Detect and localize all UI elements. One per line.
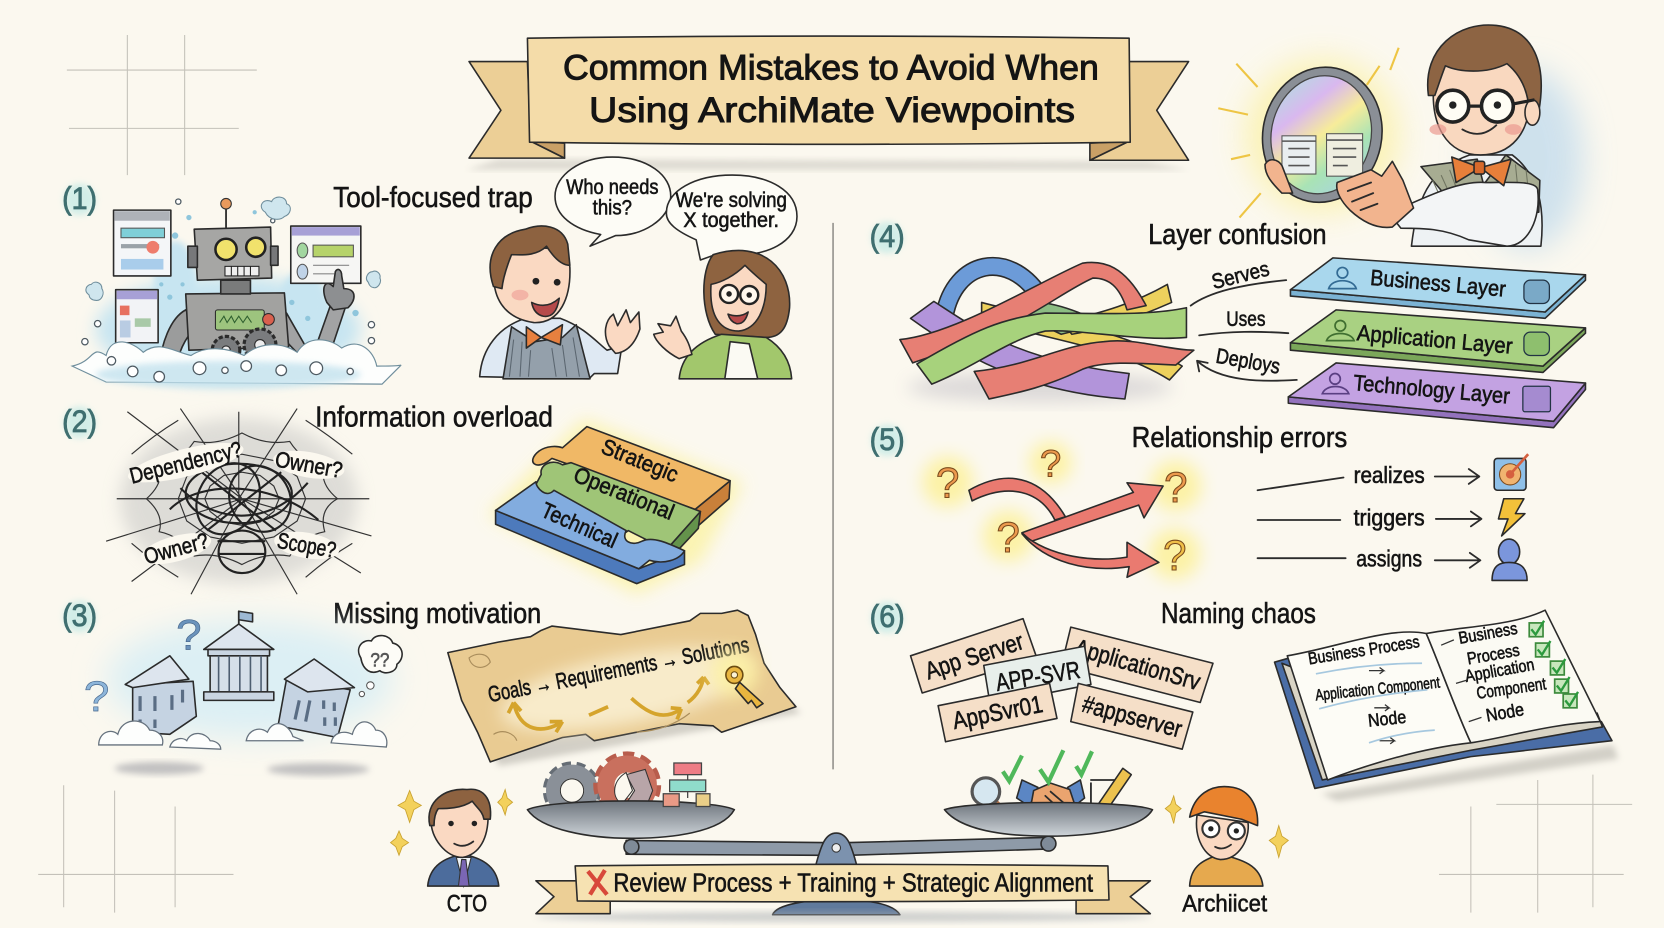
technology layer plate: Technology Layer: [1352, 370, 1511, 409]
section 1 heading: Tool-focused trap: [333, 182, 533, 214]
book text: Process: [1466, 641, 1521, 669]
robot arms: [159, 310, 196, 366]
card: App Server: App Server: [922, 628, 1027, 685]
handshake: [1017, 780, 1085, 817]
orange piece: [533, 427, 730, 528]
green piece: [531, 462, 700, 562]
triggers relation: triggers: [1354, 504, 1425, 530]
book text: Application: [1464, 655, 1536, 686]
glowing question marks: ?: [1040, 442, 1061, 485]
web labels: Dependency?: [127, 437, 244, 489]
ruler: [1093, 768, 1131, 815]
section 2 number: (2): [62, 403, 97, 439]
clouds: [99, 721, 387, 749]
parchment map: [448, 610, 801, 766]
architect figure: [1165, 787, 1288, 918]
beam: [626, 837, 1051, 855]
presenter arm and hands: [1265, 160, 1538, 246]
web labels: [125, 435, 347, 570]
card: APP-SVR: [984, 646, 1091, 705]
robot gears: [212, 336, 240, 364]
title text: Using ArchiMate Viewpoints: [589, 91, 1075, 130]
red ribbon upper: [900, 262, 1146, 363]
sparkles: [1165, 796, 1288, 857]
robot head: [194, 227, 272, 280]
route arrows: [508, 677, 709, 732]
realizes relation: [1258, 454, 1528, 490]
green piece: Operational: [570, 462, 678, 525]
left building: [125, 656, 196, 734]
section 4 heading: Layer confusion: [1148, 219, 1327, 251]
presenter head: [1428, 25, 1541, 186]
section 3 number: (3): [62, 597, 97, 633]
left page: [1287, 632, 1471, 780]
inconsistent name cards: [911, 619, 1213, 749]
right page: [1426, 610, 1600, 743]
icon: lightning: [1498, 499, 1525, 536]
right pan: [944, 750, 1152, 836]
CTO figure: CTO: [447, 891, 487, 918]
yellow ribbon: [982, 284, 1182, 380]
glowing question marks: ?: [1163, 532, 1186, 579]
glowing question marks: ?: [1164, 464, 1188, 511]
tangled red arrows: [969, 478, 1163, 577]
base: [773, 900, 900, 915]
card: #appserver: #appserver: [1079, 691, 1185, 743]
check boxes: [1529, 623, 1577, 708]
orange piece: Strategic: [598, 434, 682, 487]
blue piece: [496, 482, 684, 584]
relation labels: Uses: [1226, 308, 1266, 331]
gears: [547, 756, 657, 817]
screen panels: [114, 210, 361, 343]
relation labels: Serves: [1209, 258, 1272, 294]
business layer plate: Business Layer: [1369, 265, 1507, 302]
application layer plate: [1290, 310, 1585, 372]
realizes relation: realizes: [1354, 462, 1425, 488]
book text: Application Component: [1315, 674, 1441, 704]
foam: [72, 340, 401, 384]
presenter body: [1411, 155, 1542, 246]
title text: [563, 49, 1099, 130]
icon: crossed tools: [588, 870, 607, 895]
book text: Business: [1457, 619, 1519, 648]
map text: Goals → Requirements → Solutions: [486, 632, 751, 707]
glowing question marks: ?: [936, 460, 959, 507]
section 5 heading: Relationship errors: [1132, 422, 1347, 454]
assigns relation: [1258, 539, 1527, 580]
section 6 number: (6): [870, 598, 905, 634]
blue piece: Technical: [538, 497, 621, 553]
magnifier: [972, 778, 1010, 817]
pivot: [815, 833, 857, 868]
icon: person: [1492, 539, 1527, 580]
application layer plate: Application Layer: [1356, 320, 1514, 359]
triggers relation: [1258, 499, 1525, 536]
book text: Business Process: [1307, 632, 1421, 668]
book text: Node: [1367, 707, 1407, 731]
speech bubble: who needs this: Who needs: [566, 176, 658, 199]
architect figure: Archiicet: [1182, 891, 1267, 918]
card: APP-SVR: APP-SVR: [994, 657, 1082, 697]
arrows on pages: [1316, 640, 1481, 744]
glowing question marks: ?: [996, 514, 1020, 561]
open style-guide book: [1275, 610, 1618, 801]
sketch grid bottom left: [38, 785, 233, 913]
thought cloud: ??: [370, 650, 389, 671]
purple ribbon: [911, 301, 1129, 399]
robot body: [186, 293, 289, 350]
speech bubble: solving together: We're solving: [675, 189, 787, 212]
section 1 number: (1): [62, 180, 97, 216]
mirror: [1250, 56, 1395, 214]
green ribbon: [917, 308, 1186, 384]
book text: Node: [1484, 699, 1525, 726]
woman with glasses: [654, 250, 792, 379]
speech bubble: who needs this: [555, 157, 671, 246]
section 3 heading: Missing motivation: [333, 598, 541, 630]
key: [711, 649, 763, 708]
layered puzzle: [488, 419, 743, 594]
card: AppSvr01: AppSvr01: [950, 691, 1045, 735]
section 5 number: (5): [870, 421, 905, 457]
assigns relation: assigns: [1356, 546, 1422, 572]
man with bow tie: [480, 226, 640, 379]
speech bubble: who needs this: this?: [593, 196, 632, 219]
business layer plate: [1290, 258, 1585, 318]
section 4 number: (4): [870, 218, 905, 254]
left pan: [527, 756, 734, 838]
web labels: Owner?: [141, 528, 211, 569]
right building: [278, 659, 354, 738]
centre divider: [832, 223, 834, 769]
question marks: ?: [84, 673, 109, 720]
check marks: [1003, 750, 1092, 782]
sparkles: [391, 790, 513, 855]
robot in foam: [72, 197, 401, 388]
floating buildings: [84, 611, 402, 776]
red ribbon lower: [974, 341, 1194, 399]
book text: Component: [1475, 674, 1548, 703]
question marks: [84, 611, 202, 720]
technology layer plate: [1288, 363, 1585, 428]
relation labels: Deploys: [1214, 345, 1282, 379]
section 6 heading: Naming chaos: [1161, 598, 1316, 630]
card: ApplicationSrv: ApplicationSrv: [1071, 634, 1204, 696]
speech bubble: solving together: X together.: [683, 209, 779, 232]
title text: Common Mistakes to Avoid When: [563, 49, 1099, 88]
centre building: [204, 611, 274, 700]
icon: target: [1494, 454, 1528, 490]
bottom banner: [536, 864, 1151, 922]
tangled cobweb: [106, 409, 371, 594]
sketch grid bottom right: [1439, 775, 1632, 913]
speech bubble: solving together: [666, 175, 797, 260]
thought cloud: [359, 636, 402, 697]
section 2 heading: Information overload: [315, 402, 553, 434]
book text: [1307, 619, 1548, 731]
sketch grid top left: [67, 35, 257, 175]
web labels: Scope?: [275, 528, 338, 563]
relation labels: [1191, 258, 1297, 381]
presenter with prism mirror: [1218, 25, 1583, 249]
tangled ribbons: [900, 262, 1194, 402]
web labels: Owner?: [273, 447, 344, 483]
blue ribbon: [944, 266, 1039, 315]
question marks: ?: [176, 611, 202, 658]
balance scale: [527, 750, 1152, 915]
CTO figure: [391, 789, 513, 918]
banner text: Review Process + Training + Strategic Alignment: [613, 869, 1093, 897]
diagram blocks: [663, 763, 710, 806]
title banner: [467, 36, 1189, 170]
glowing question marks: [922, 441, 1201, 579]
